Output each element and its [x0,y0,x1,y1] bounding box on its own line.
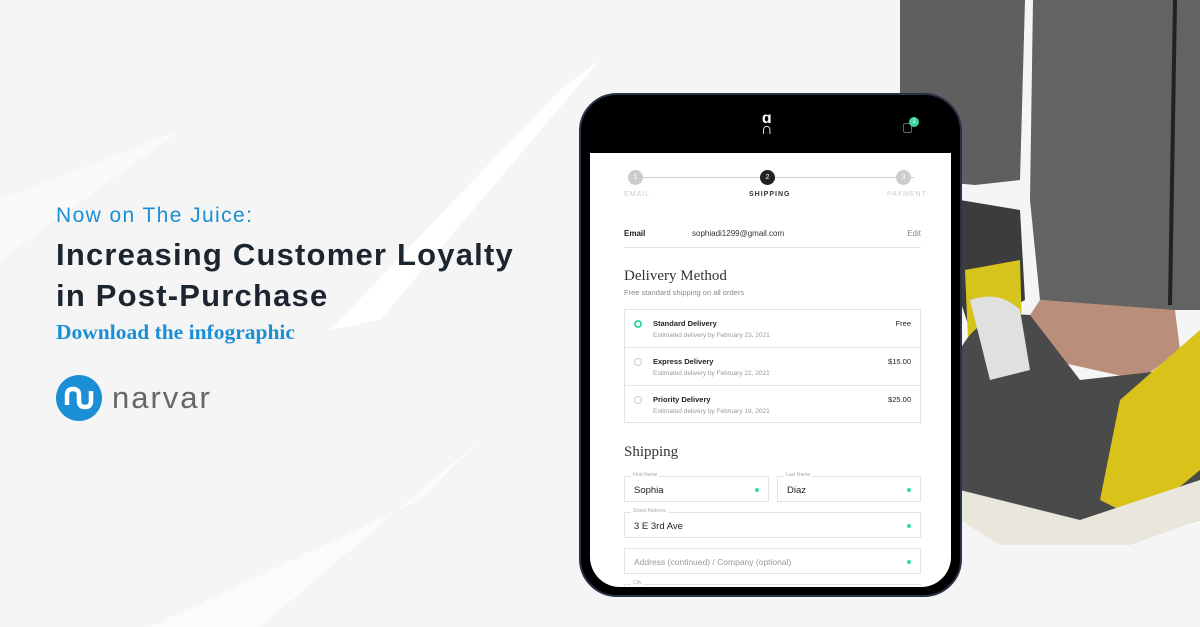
front leg pants [1030,0,1200,310]
stepper: 2 [766,174,769,181]
icon: on logo: ɑ [762,110,772,127]
delivery method heading: Delivery Method [624,268,727,284]
shipping form: Diaz [787,485,806,496]
delivery options: Estimated delivery by February 19, 2021 [653,408,770,415]
back leg pants [900,0,1025,185]
front shoe [960,314,1200,540]
delivery options: Priority Delivery [653,395,711,404]
email row: sophiadi1299@gmail.com [692,229,784,238]
shipping form: Street Address [633,508,666,514]
shipping form: City [633,580,642,586]
phone header [761,110,919,138]
stepper: PAYMENT [887,191,927,198]
delivery options: Standard Delivery [653,319,717,328]
shipping form: 3 E 3rd Ave [634,521,683,532]
stepper: 3 [902,174,905,181]
title [56,237,514,313]
icon: cart [903,123,912,133]
phone header: 1 [912,119,916,125]
stepper: EMAIL [624,191,650,198]
wordmark: narvar [112,380,212,415]
stepper: SHIPPING [749,191,790,198]
link text: Download the infographic [56,320,295,344]
photo: legs and shoe [900,0,1200,627]
ankle skin [1020,300,1180,380]
delivery options: $25.00 [888,395,911,404]
shipping heading: Shipping [624,444,678,460]
delivery options: $15.00 [888,357,911,366]
phone screen: Last Name [786,472,810,478]
phone screen: Free standard shipping on all orders [624,288,744,297]
phone screen: First Name [633,472,657,478]
logo: narvar [56,375,212,421]
icon: logo circle [56,375,102,421]
delivery options: Estimated delivery by February 22, 2021 [653,370,770,377]
shipping form [624,472,921,587]
delivery options: Estimated delivery by February 23, 2021 [653,332,770,339]
email row: Email [624,229,645,238]
delivery options: Free [896,319,911,328]
icon: on logo: ∩ [761,121,773,138]
kicker: Now on The Juice: [56,204,253,227]
email row: Edit [907,229,921,238]
delivery options [624,309,921,423]
title: in Post-Purchase [56,278,328,313]
heading block [56,204,514,344]
stepper: 1 [634,174,637,181]
stepper [624,170,927,198]
phone screen [590,153,951,587]
title: Increasing Customer Loyalty [56,237,514,272]
shipping form: Address (continued) / Company (optional) [634,557,791,567]
shipping form: Sophia [634,485,664,496]
icon: on logo [761,110,773,138]
delivery options: Express Delivery [653,357,713,366]
back shoe [960,200,1025,330]
phone mockup [579,93,962,597]
email row [624,216,921,248]
